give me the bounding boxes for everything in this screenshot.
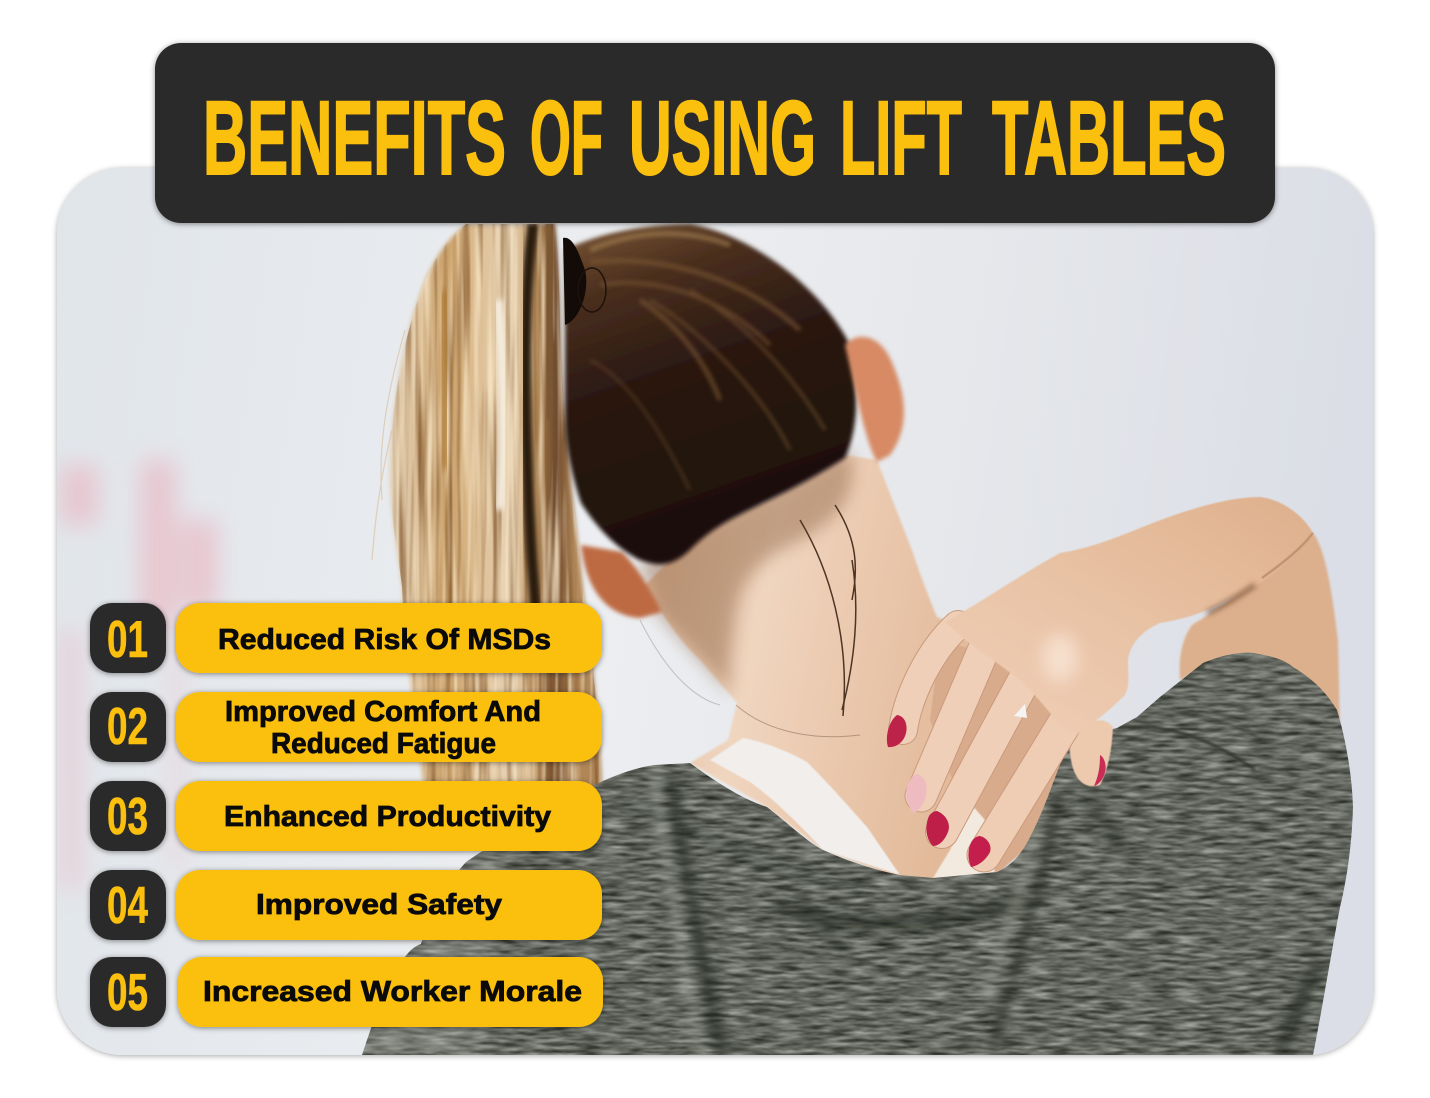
benefit row 03	[90, 781, 602, 851]
title text: BENEFITS	[203, 80, 506, 197]
label: enhanced productivity: Enhanced Productivity	[224, 801, 551, 833]
photo background wall	[276, 223, 901, 1055]
head hair	[563, 224, 856, 564]
benefit row 01	[90, 603, 602, 673]
benefit row 02	[90, 692, 602, 762]
ponytail	[372, 220, 610, 800]
number badge 05	[90, 957, 166, 1027]
finger 4	[984, 690, 1085, 855]
elbow crease shadow	[1207, 585, 1255, 613]
title text: TABLES	[992, 80, 1226, 197]
label: improved safety: Improved Safety	[256, 889, 502, 921]
label: improved comfort and reduced fatigue: Reduced Fatigue	[271, 728, 496, 760]
label: reduced risk of MSDs	[176, 603, 602, 673]
label: improved safety	[176, 870, 602, 940]
shirt	[350, 640, 1360, 1056]
knuckle highlight	[1042, 634, 1078, 682]
title text	[203, 80, 1226, 197]
loose neck hairs	[640, 505, 860, 737]
number badge 02	[90, 692, 166, 762]
number badge 01	[90, 603, 166, 673]
hair tie	[563, 238, 586, 325]
shirt dark folds	[620, 775, 1320, 1055]
finger 3	[942, 660, 1035, 832]
back of hand and forearm	[945, 497, 1313, 735]
number badge 01: 01	[107, 611, 148, 669]
number badge 02: 02	[107, 698, 148, 756]
hand and forearm	[903, 497, 1313, 855]
number badge 04: 04	[107, 877, 148, 935]
label: increased worker morale: Increased Worker Morale	[203, 976, 582, 1008]
benefit row 05	[90, 957, 603, 1027]
shirt light folds	[653, 772, 1040, 1055]
benefit row 04	[90, 870, 602, 940]
blurred pink objects on left	[58, 460, 218, 890]
ear	[845, 337, 904, 462]
gap between fingers	[1014, 704, 1027, 718]
finger 2	[921, 630, 992, 796]
number badge 04	[90, 870, 166, 940]
nape hair haze	[640, 450, 853, 700]
nails	[887, 715, 1106, 867]
neck and back skin	[640, 455, 1000, 880]
label: increased worker morale	[178, 957, 603, 1027]
label: improved comfort and reduced fatigue	[176, 692, 602, 762]
upper arm	[1180, 533, 1340, 730]
near ear	[581, 545, 662, 618]
number badge 03	[90, 781, 166, 851]
title text: OF	[530, 80, 603, 197]
title bar	[155, 43, 1275, 223]
hair highlight strands	[590, 234, 825, 490]
bra strap	[710, 738, 900, 875]
title text: LIFT	[840, 80, 962, 197]
panel: photo of woman holding her neck	[57, 168, 1373, 1056]
finger 1	[903, 625, 958, 730]
label: reduced risk of MSDs: Reduced Risk Of MSDs	[218, 624, 551, 656]
title text: USING	[629, 80, 816, 197]
number badge 03: 03	[107, 788, 148, 846]
label: enhanced productivity	[176, 781, 602, 851]
skin shadow between fingers	[930, 646, 1060, 872]
label: improved comfort and reduced fatigue: Improved Comfort And	[225, 696, 541, 728]
thumb	[1070, 720, 1113, 786]
strap under hand	[933, 805, 998, 878]
number badge 05: 05	[107, 964, 148, 1022]
